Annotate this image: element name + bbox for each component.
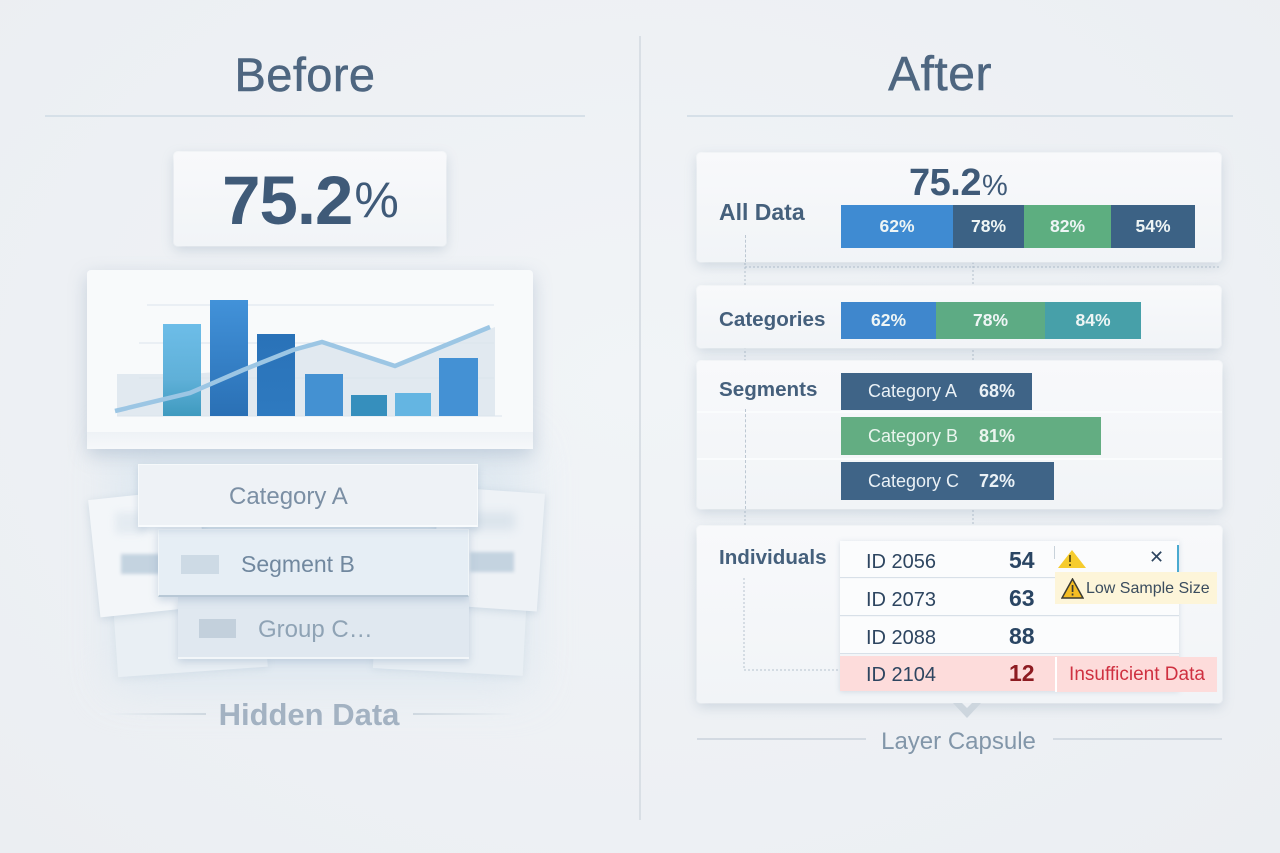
label: Group C… — [258, 616, 373, 643]
layer: all data — [697, 153, 1221, 262]
stacked bar: 82% — [1050, 216, 1085, 236]
heading: After: After — [888, 48, 992, 100]
card: Category A — [138, 464, 478, 527]
vertical connector — [745, 235, 746, 262]
stacked bar: 62% — [879, 216, 915, 236]
row: ID 2073 — [840, 579, 1179, 616]
row: ID 2104: ID 2104 — [866, 664, 936, 686]
icon: warning — [1058, 550, 1086, 568]
row: ID 2073: ID 2073 — [866, 589, 936, 611]
heading: Before: Before — [235, 48, 375, 100]
arrow — [953, 703, 981, 718]
panel: before — [45, 48, 585, 732]
close icon: ✕ — [1149, 547, 1164, 567]
vertical connector — [745, 409, 746, 509]
metric card: 75.2%: 75.2 — [222, 162, 352, 238]
row: ID 2088: ID 2088 — [866, 627, 936, 649]
heading rule — [687, 115, 1233, 117]
soft glow behind hidden stack — [110, 440, 530, 690]
row: ID 2104 — [840, 656, 1179, 691]
bar and line chart — [87, 300, 533, 449]
label: Categories — [719, 308, 825, 331]
tooltip text: Low Sample Size — [1086, 580, 1210, 597]
label: Individuals — [719, 546, 827, 569]
cell divider — [1054, 546, 1055, 559]
hidden data stack — [86, 464, 547, 678]
metric card: 75.2% — [174, 152, 446, 246]
metric: 75.2% — [909, 162, 1007, 204]
dashed connectors — [744, 262, 1219, 525]
label: Segment B — [241, 551, 355, 577]
layer: categories — [697, 286, 1221, 348]
label: Segments — [719, 378, 817, 401]
panel: after — [687, 48, 1233, 754]
bar: Category A — [841, 373, 1032, 410]
bar: Category B: Category B — [868, 426, 958, 446]
bar: Category A: Category A — [868, 381, 957, 401]
back sheets — [112, 582, 268, 677]
caption: Layer Capsule: Layer Capsule — [881, 728, 1036, 754]
icon: warning — [1061, 578, 1084, 599]
card: Segment B — [158, 529, 469, 597]
caption: Hidden Data: Hidden Data — [219, 697, 399, 732]
bar: Category B: 81% — [979, 426, 1015, 446]
row: ID 2104: 12 — [1009, 660, 1035, 686]
stacked bar: 62% — [871, 310, 906, 330]
tooltip: low sample size — [1055, 572, 1217, 604]
row: ID 2056 — [840, 541, 1179, 578]
metric card: 75.2%: % — [354, 172, 398, 228]
stacked bar: 84% — [1075, 310, 1111, 330]
flag: insufficient data: Insufficient Data — [1069, 664, 1205, 684]
row: ID 2088: 88 — [1009, 623, 1035, 649]
dashed connector — [744, 578, 838, 670]
caption: Layer Capsule — [697, 703, 1222, 754]
bar: Category C: 72% — [979, 471, 1015, 491]
label: All Data — [719, 199, 805, 225]
layer: segments — [697, 361, 1222, 509]
stacked bar — [841, 205, 1195, 248]
label: Category A — [229, 483, 348, 510]
row: ID 2088 — [840, 617, 1179, 654]
card: Group C — [178, 597, 469, 659]
stacked bar: 78% — [971, 216, 1006, 236]
stacked bar: 78% — [973, 310, 1008, 330]
row: ID 2073: 63 — [1009, 585, 1035, 611]
center divider — [639, 36, 641, 820]
stacked bar: 54% — [1135, 216, 1171, 236]
flag: insufficient data — [1057, 657, 1217, 692]
data table — [840, 541, 1179, 691]
bar: Category C — [841, 462, 1054, 500]
bar: Category C: Category C — [868, 471, 959, 491]
layer: individuals — [697, 526, 1222, 703]
bar: Category B — [841, 417, 1101, 455]
row: ID 2056: 54 — [1009, 547, 1035, 573]
chart card — [87, 270, 533, 449]
bar: Category A: 68% — [979, 381, 1015, 401]
row: ID 2056: ID 2056 — [866, 551, 936, 573]
stacked bar — [841, 302, 1141, 339]
heading rule — [45, 115, 585, 117]
